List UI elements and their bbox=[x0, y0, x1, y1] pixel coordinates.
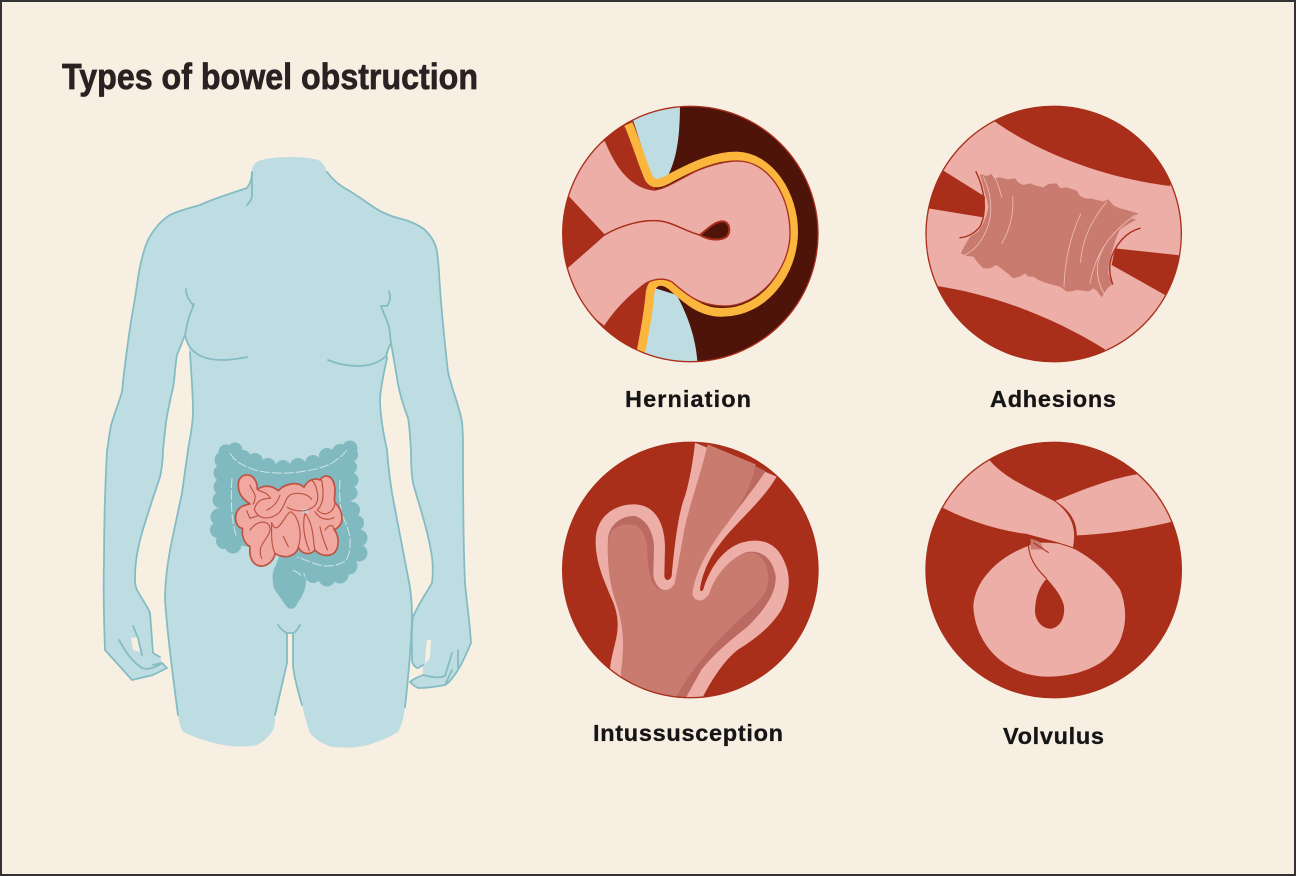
fold line bbox=[604, 221, 700, 235]
left bowel band bbox=[943, 460, 1074, 548]
medallion: intussusception bbox=[555, 436, 825, 706]
right wedge bbox=[1112, 248, 1179, 295]
left wedge bbox=[929, 170, 985, 218]
bowel wall bbox=[596, 443, 789, 706]
scar tissue patch bbox=[961, 174, 1138, 297]
peritoneal sac (yellow) bbox=[628, 124, 794, 352]
left muscle bbox=[563, 120, 655, 350]
top cavity bbox=[994, 107, 1170, 186]
medallion: herniation bbox=[555, 100, 825, 370]
body contour lines bbox=[104, 172, 471, 715]
cavity background bbox=[563, 443, 818, 696]
adhesion edges bbox=[960, 172, 1140, 284]
small intestine bbox=[236, 475, 342, 566]
medallion: adhesions bbox=[920, 100, 1190, 370]
right bowel band bbox=[1056, 474, 1172, 536]
label: Volvulus: Volvulus bbox=[1003, 723, 1104, 749]
bowel shadow bbox=[608, 444, 776, 706]
label: Adhesions: Adhesions bbox=[990, 386, 1116, 412]
twist fold bbox=[1031, 539, 1044, 549]
herniated bowel bbox=[555, 140, 790, 327]
label: Herniation: Herniation bbox=[625, 386, 751, 412]
hand gaps bbox=[131, 637, 431, 664]
medallion: volvulus bbox=[920, 436, 1190, 706]
ring lumen bbox=[1035, 579, 1064, 629]
body silhouette bbox=[104, 157, 471, 748]
large intestine bbox=[210, 440, 368, 609]
lumen bbox=[700, 221, 729, 240]
twist line bbox=[1028, 539, 1047, 579]
twisted ring bbox=[973, 543, 1125, 677]
scar strands bbox=[965, 175, 1135, 295]
bottom cavity bbox=[938, 286, 1105, 361]
bowel bands bbox=[926, 122, 1181, 350]
abdominal wall bbox=[633, 107, 698, 361]
dark tissue background bbox=[654, 107, 818, 361]
bowel interior bbox=[608, 444, 768, 706]
title: Types of bowel obstruction bbox=[62, 56, 478, 97]
cavity background bbox=[926, 443, 1181, 697]
label: Intussusception: Intussusception bbox=[593, 720, 783, 746]
human body illustration bbox=[104, 157, 471, 748]
